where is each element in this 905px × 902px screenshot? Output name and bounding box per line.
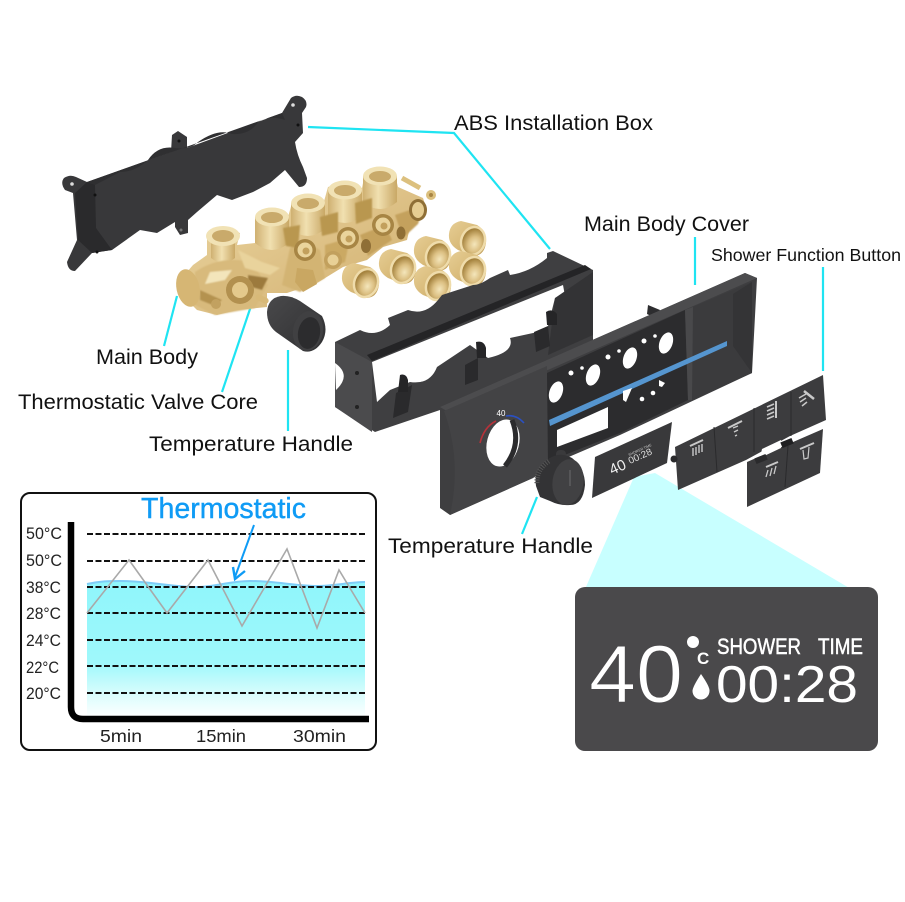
small display panel: 00:28 xyxy=(627,447,654,467)
water drop icon xyxy=(692,674,710,700)
x axis labels xyxy=(100,726,346,746)
label: Shower Function Button: Shower Function Button xyxy=(711,245,901,265)
shower function buttons xyxy=(670,375,826,507)
y axis labels: 28°C xyxy=(26,605,61,623)
label: ABS Installation Box: ABS Installation Box xyxy=(454,111,653,135)
brass end caps xyxy=(342,221,491,305)
y axis labels: 38°C xyxy=(26,579,61,597)
y axis labels: 22°C xyxy=(26,659,59,677)
blue light strip xyxy=(549,341,727,426)
label: Main Body Cover: Main Body Cover xyxy=(584,212,749,236)
chart axes xyxy=(71,522,369,719)
label: Temperature Handle (lower): Temperature Handle xyxy=(388,534,593,558)
label: Temperature Handle (upper): Temperature Handle xyxy=(149,432,353,456)
fluctuating grey line xyxy=(87,549,365,628)
y axis labels: 20°C xyxy=(26,685,61,703)
y axis labels: 50°C xyxy=(26,525,62,543)
x axis labels: 5min xyxy=(100,726,142,746)
temperature handle knob xyxy=(536,450,587,507)
shading details xyxy=(195,198,425,315)
degree symbol xyxy=(687,636,699,648)
y axis labels xyxy=(26,525,62,703)
shower label: SHOWER xyxy=(717,634,801,659)
cyan projection beam from small display to enlarged display xyxy=(575,473,878,640)
arrow to thermostatic line xyxy=(233,525,254,579)
panel: temperature chart xyxy=(21,493,376,750)
brass main body valve manifold xyxy=(173,166,436,315)
enlarged digital display xyxy=(575,587,878,751)
window cutout xyxy=(557,407,608,447)
celsius letter: C xyxy=(697,649,709,668)
label: Thermostatic Valve Core: Thermostatic Valve Core xyxy=(18,390,258,414)
y axis labels: 50°C xyxy=(26,552,62,570)
ABS installation box back plate xyxy=(62,96,307,271)
y axis labels: 24°C xyxy=(26,632,61,650)
leader lines xyxy=(164,127,823,534)
water fill area xyxy=(87,581,365,718)
x axis labels: 30min xyxy=(293,726,346,746)
temperature scale and handle hole xyxy=(480,409,525,470)
temperature reading: 40 xyxy=(589,629,683,720)
main body cover plate xyxy=(440,273,757,515)
shower timer: 00:28 xyxy=(716,656,858,714)
label: Main Body: Main Body xyxy=(96,345,198,369)
time label: TIME xyxy=(818,634,863,659)
small display panel xyxy=(592,422,672,498)
x axis labels: 15min xyxy=(196,726,246,746)
small display panel: SHOWER TIME xyxy=(628,443,653,457)
main housing frame xyxy=(335,251,660,432)
temperature scale and handle hole: 40 xyxy=(497,409,506,418)
black sleeve xyxy=(267,296,326,353)
small display panel: 40 xyxy=(607,456,629,479)
chart title: Thermostatic xyxy=(141,493,306,525)
button icons xyxy=(690,391,814,477)
